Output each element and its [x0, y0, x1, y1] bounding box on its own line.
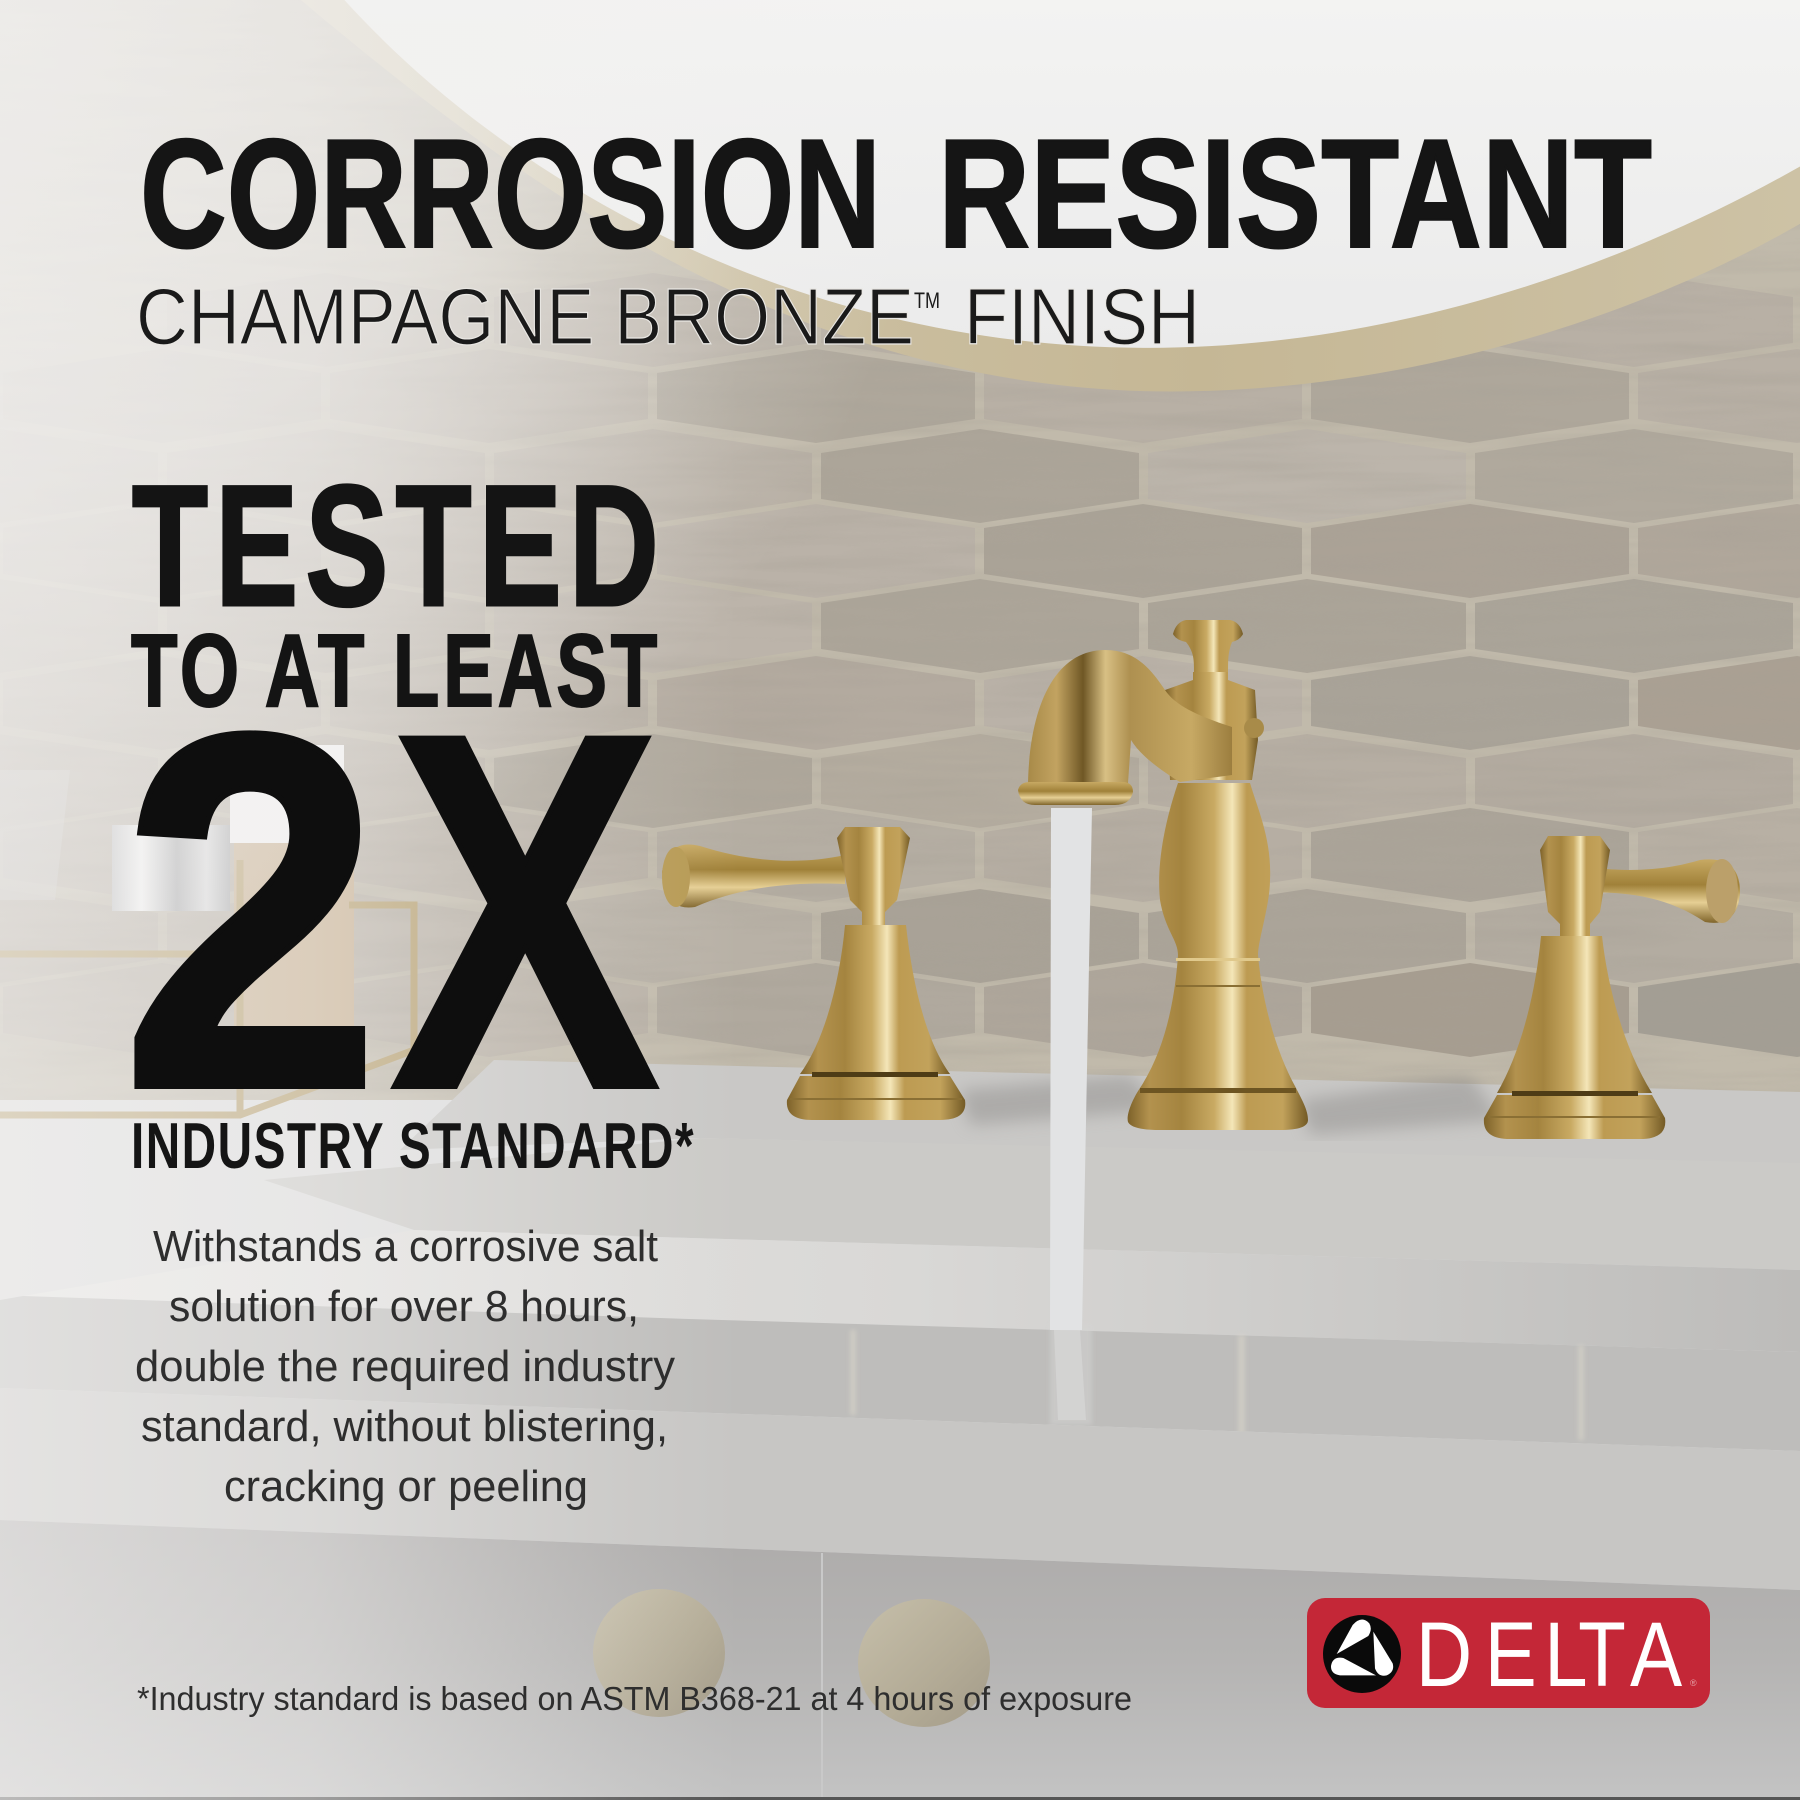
headline: 2X: [121, 630, 661, 1194]
cabinet doors: [0, 1520, 1800, 1800]
finial: [1173, 620, 1243, 672]
left faucet handle: [662, 827, 965, 1120]
counter front face: [264, 1138, 1800, 1270]
Delta logo: DELTA: [1416, 1604, 1682, 1706]
background: tiled wall: [0, 0, 1800, 1100]
lever: [662, 844, 845, 908]
right faucet handle: [1484, 836, 1740, 1139]
subtitle: FINISH: [964, 272, 1200, 361]
headline: tested: TESTED: [132, 450, 666, 642]
faucet shadows on counter: [960, 1075, 1500, 1135]
water stream: [1050, 808, 1092, 1420]
cabinet knob right: [858, 1599, 990, 1727]
description text: double the required industry: [135, 1342, 675, 1391]
subtitle: CHAMPAGNE BRONZE: [136, 272, 914, 361]
description text: cracking or peeling: [224, 1462, 588, 1511]
counter reflections: [850, 1325, 1584, 1440]
lower countertop: [0, 1296, 1800, 1451]
lower counter edge: [0, 1388, 1800, 1590]
headline: 2X: 2: [121, 630, 381, 1194]
title: CORROSION: [140, 107, 881, 280]
title: RESISTANT: [938, 107, 1652, 280]
Delta logo: ®: [1690, 1678, 1697, 1688]
subtitle: TM: [914, 288, 940, 313]
mirror frame: [301, 0, 1800, 391]
footnote: *Industry standard is based on ASTM B368-21 at 4 hours of exposure: [137, 1680, 1132, 1717]
spout: [1028, 650, 1232, 783]
headline: to at least: TO AT LEAST: [131, 613, 661, 728]
sink basin: [23, 1230, 1800, 1352]
description text: [135, 1222, 675, 1511]
cabinet knob left: [593, 1589, 725, 1717]
headline: 2X: X: [391, 630, 661, 1194]
white wash overlays on the left: [0, 0, 950, 1800]
counter top surface: [400, 1060, 1800, 1165]
title: [140, 107, 1652, 280]
icon: delta triangle mark: [1323, 1615, 1401, 1693]
body: [1128, 783, 1308, 1130]
lever: [1580, 859, 1740, 923]
background objects on the left: candle, bottle and glass tray: [0, 745, 414, 1115]
mirror glass: [344, 0, 1800, 348]
description text: solution for over 8 hours,: [169, 1282, 639, 1331]
description text: Withstands a corrosive salt: [153, 1222, 658, 1271]
centre faucet spout and body: [1018, 620, 1308, 1130]
description text: standard, without blistering,: [141, 1402, 668, 1451]
vanity countertop and sink: [0, 1060, 1800, 1800]
headline: industry standard: INDUSTRY STANDARD*: [131, 1109, 695, 1182]
Delta logo: [1307, 1598, 1710, 1708]
round mirror with gold frame: [301, 0, 1800, 391]
